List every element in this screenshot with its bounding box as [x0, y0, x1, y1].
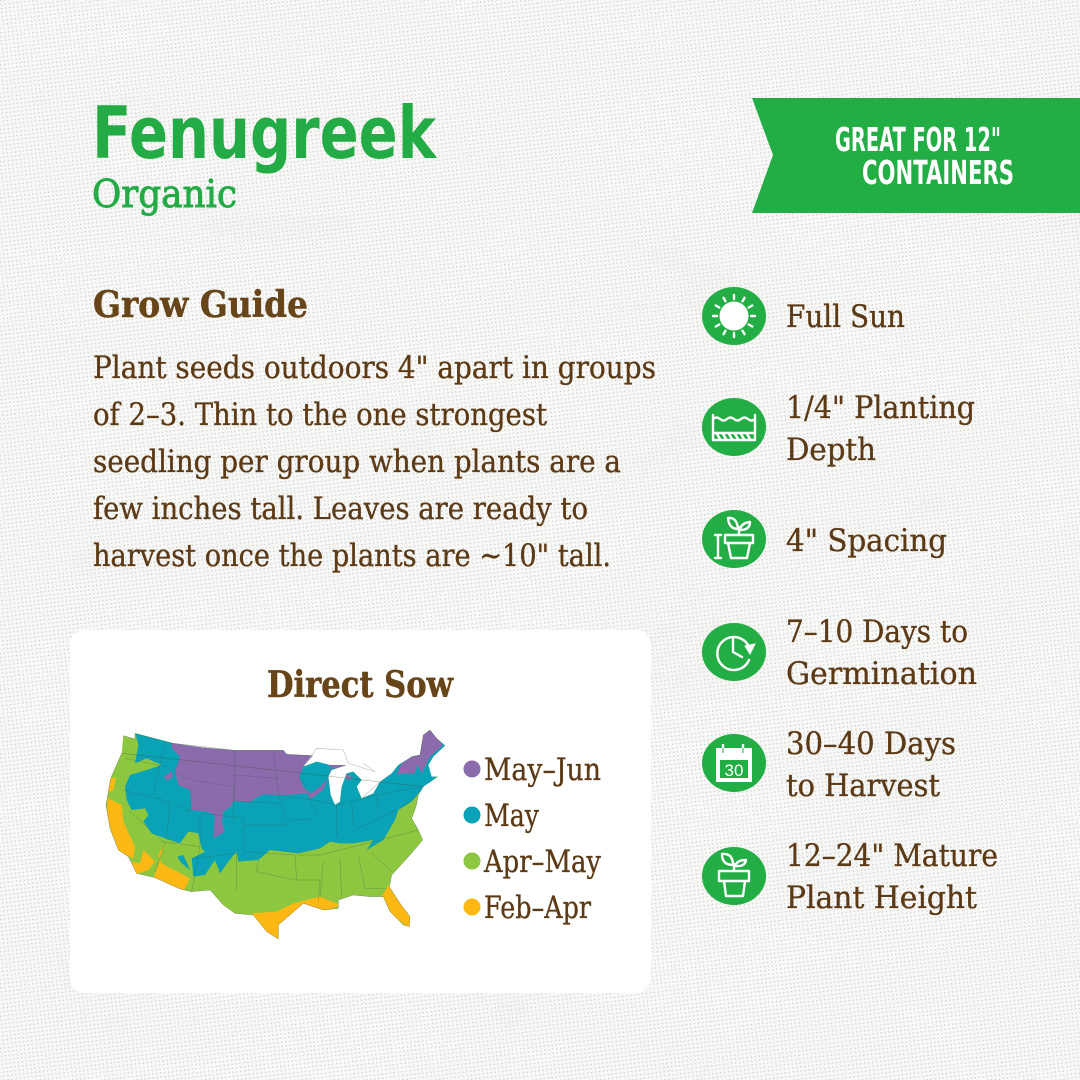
panel: direct sow map card: [70, 630, 651, 993]
banner: great for 12 inch containers: [752, 98, 1080, 213]
legend: Feb–Apr: [484, 890, 591, 926]
icon: calendar: [702, 734, 766, 792]
text block: instructions: of 2–3. Thin to the one strongest: [93, 397, 547, 433]
icon: sun: [702, 287, 766, 345]
heading: grow guide: Grow Guide: [93, 284, 308, 326]
label: full sun: Full Sun: [786, 299, 905, 335]
title: Fenugreek: [92, 91, 438, 175]
text block: instructions: [93, 350, 656, 574]
label: days to germination: Germination: [786, 656, 977, 692]
label: planting depth: 1/4" Planting: [786, 390, 975, 426]
state borders: [123, 742, 423, 902]
label: days to germination: [786, 614, 977, 692]
text block: instructions: few inches tall. Leaves are ready to: [93, 491, 588, 527]
label: planting depth: Depth: [786, 432, 876, 468]
legend: May–Jun: [484, 752, 601, 788]
label: days to harvest: 30–40 Days: [786, 726, 956, 762]
label: mature plant height: [786, 838, 998, 916]
icon: planting depth: [702, 398, 766, 456]
subtitle: Organic: [92, 172, 237, 216]
label: days to germination: 7–10 Days to: [786, 614, 968, 650]
legend: [464, 752, 601, 926]
heading: direct sow: Direct Sow: [267, 664, 454, 706]
label: mature plant height: Plant Height: [786, 880, 978, 916]
label: spacing: 4" Spacing: [786, 523, 947, 559]
label: planting depth: [786, 390, 975, 468]
label: mature plant height: 12–24" Mature: [786, 838, 998, 874]
label: days to harvest: [786, 726, 956, 804]
label: days to harvest: to Harvest: [786, 768, 940, 804]
map: sowing zones of the US: [106, 730, 445, 940]
text block: instructions: Plant seeds outdoors 4" apart in groups: [93, 350, 656, 386]
icon: calendar: 30: [725, 761, 743, 780]
icon: spacing: [702, 510, 766, 568]
text block: instructions: harvest once the plants are ~10" tall.: [93, 538, 611, 574]
icon: potted plant: [702, 847, 766, 905]
legend: Apr–May: [483, 844, 601, 880]
text block: instructions: seedling per group when plants are a: [93, 444, 621, 480]
legend: May: [484, 798, 539, 834]
icon: germination clock: [702, 623, 766, 681]
